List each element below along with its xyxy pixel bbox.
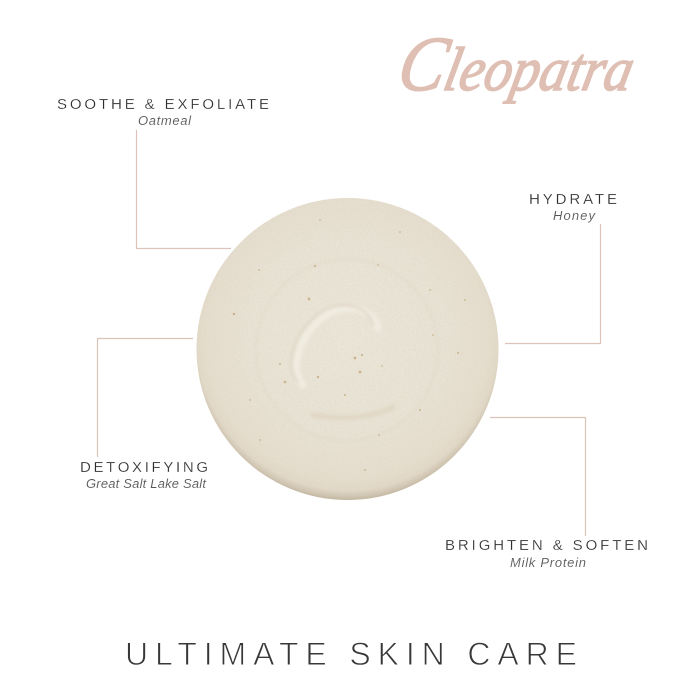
heading: Ultimate Skin Care: ULTIMATE SKIN CARE [125, 636, 577, 672]
callout: Brighten & Soften, Milk Protein [445, 418, 648, 570]
icon: embossed C logo on the bath bomb [256, 259, 438, 441]
speckles on the bath bomb surface [233, 219, 466, 471]
title: Cleopatra script wordmark: Cleopatra [391, 22, 644, 108]
callout: Detoxifying, Great Salt Lake Salt: DETOXIFYING [80, 459, 208, 476]
callout: Brighten & Soften, Milk Protein: Milk Protein [510, 555, 586, 570]
callout: Detoxifying, Great Salt Lake Salt: Great Salt Lake Salt [86, 476, 207, 491]
callout: Soothe & Exfoliate, Oatmeal: SOOTHE & EXFOLIATE [57, 96, 269, 113]
product: round bath bomb [196, 197, 499, 501]
callout: Brighten & Soften, Milk Protein: BRIGHTEN & SOFTEN [445, 537, 648, 554]
callout: Soothe & Exfoliate, Oatmeal: Oatmeal [138, 113, 192, 128]
callout: Hydrate, Honey: HYDRATE [529, 191, 617, 208]
callout: Detoxifying, Great Salt Lake Salt [80, 338, 208, 491]
callout: Soothe & Exfoliate, Oatmeal [57, 96, 269, 248]
callout: Hydrate, Honey [505, 191, 617, 344]
callout: Hydrate, Honey: Honey [553, 208, 596, 223]
